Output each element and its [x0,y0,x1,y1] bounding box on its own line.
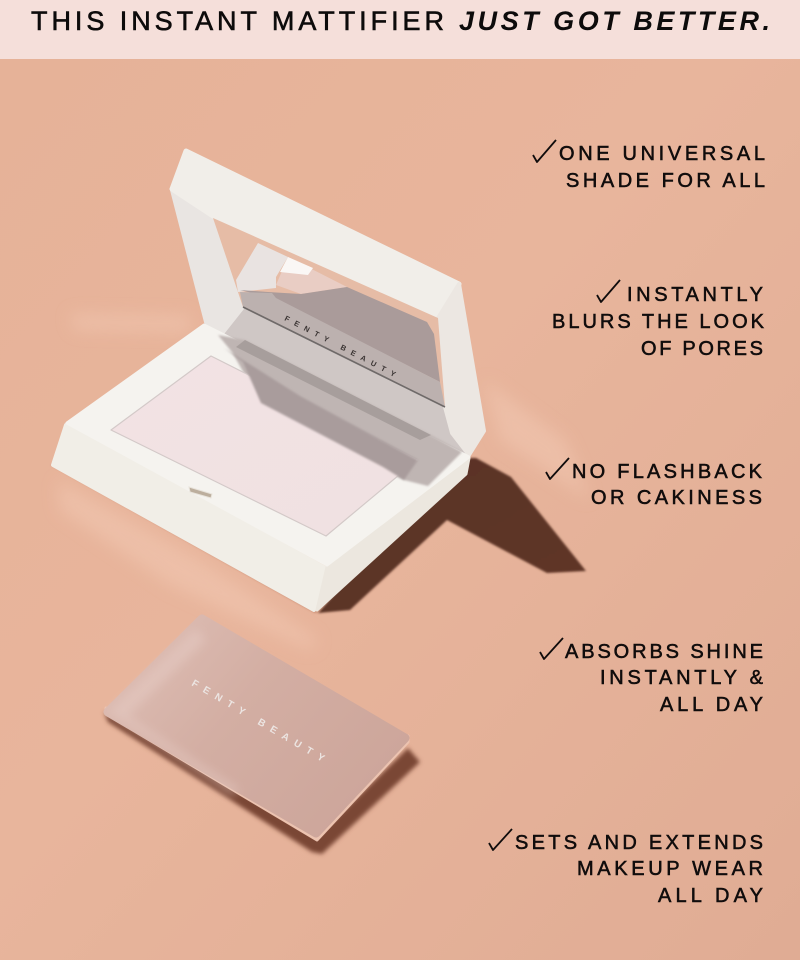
benefit: blurs pores: OF PORES [641,338,763,360]
benefit: no flashback [546,458,763,509]
benefit: sets makeup: ALL DAY [658,885,763,907]
closed compact highlight [108,628,240,796]
light streaks on background [58,314,590,650]
base reflection edge [51,462,321,613]
lid inner lower panel [204,296,470,458]
benefit: sets makeup: MAKEUP WEAR [577,858,763,880]
closed compact shadow [104,712,420,854]
benefit: sets makeup [489,829,763,907]
benefit: blurs pores: BLURS THE LOOK [552,311,765,333]
hinge bar [236,340,431,440]
benefit: blurs pores [552,280,765,360]
benefit: no flashback: OR CAKINESS [591,487,762,509]
check icon [546,458,569,479]
base top rim [67,325,469,565]
closed compact logo: FENTY BEAUTY [189,678,326,765]
compact cast shadow [318,458,586,613]
lid left band [172,152,243,336]
mirror edge [243,307,445,407]
closed compact lid [108,619,405,833]
rim shadow from lid [218,335,462,486]
base front face [53,425,327,610]
benefit: absorbs shine: ALL DAY [660,694,763,716]
benefit: sets makeup: SETS AND EXTENDS [515,832,763,854]
mirror reflection: white lid [236,243,288,292]
product: closed leather compact [104,619,420,854]
mirror reflection: pink panel [276,257,347,294]
benefit: absorbs shine [540,638,764,716]
header band [0,0,800,59]
check icon [597,280,620,302]
notch [189,487,212,498]
product: open compact [51,151,586,613]
check icon [533,140,556,162]
powder pan [111,356,417,536]
benefit: no flashback: NO FLASHBACK [572,461,763,483]
lid top band [172,151,459,316]
mirror [213,218,445,407]
benefit: one universal shade: SHADE FOR ALL [566,170,765,192]
benefit: absorbs shine: ABSORBS SHINE [565,641,763,663]
closed compact edge [106,708,408,840]
title: THIS INSTANT MATTIFIER [31,6,444,36]
mirror label: FENTY BEAUTY [283,314,397,379]
mirror reflection: tab [280,257,313,275]
base right face [317,458,469,610]
mirror reflection: grey shadow [240,287,440,382]
benefit: blurs pores: INSTANTLY [627,284,763,306]
pan shadow [224,348,418,480]
benefit: one universal shade: ONE UNIVERSAL [559,143,765,165]
lid right band [438,284,484,455]
benefit: one universal shade [533,140,765,192]
check icon [489,829,512,850]
benefit: absorbs shine: INSTANTLY & [600,667,764,689]
title: JUST GOT BETTER. [459,6,770,36]
mirror lower strip [240,292,445,407]
check icon [540,638,563,659]
title [31,6,770,36]
